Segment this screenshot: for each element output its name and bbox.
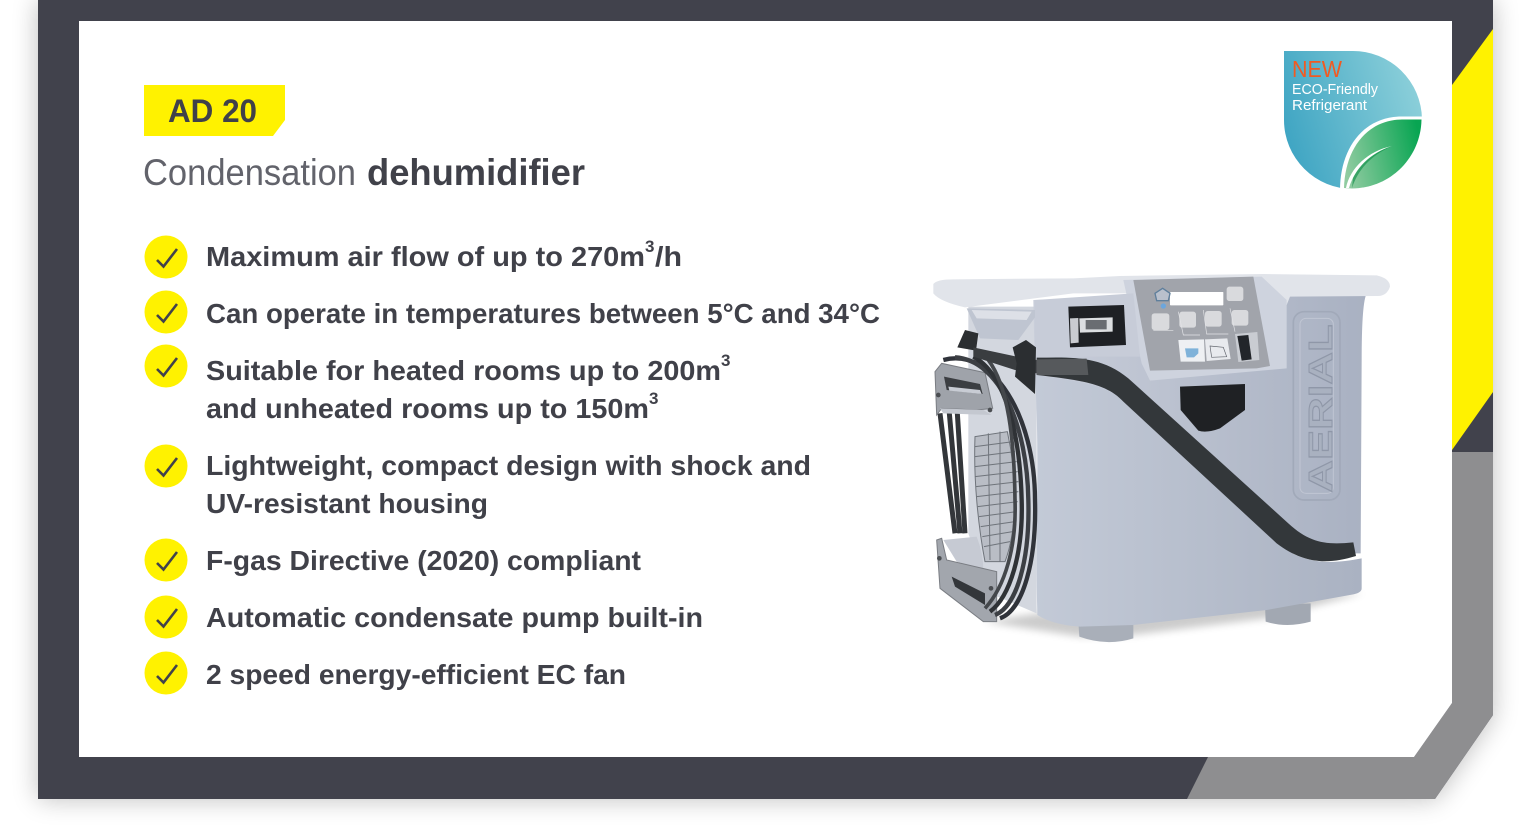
- feature: fan: 2 speed energy-efficient EC fan: [206, 659, 626, 690]
- feature: F-gas: F-gas Directive (2020) compliant: [206, 545, 641, 576]
- feature: pump: Automatic condensate pump built-in: [206, 602, 703, 633]
- feature: air flow: 3: [645, 237, 654, 256]
- feature: room size: and unheated rooms up to 150m: [206, 393, 649, 424]
- product photo: dehumidifier: [933, 274, 1390, 642]
- feature: air flow: /h: [655, 241, 682, 272]
- panel: white content area: [79, 21, 1452, 757]
- heading: [143, 152, 585, 193]
- feature: room size: [144, 344, 730, 424]
- feature: housing: UV-resistant housing: [206, 488, 488, 519]
- upper body: [1033, 293, 1366, 553]
- cord clips and strap: [957, 330, 1088, 394]
- feature: housing: [144, 444, 811, 519]
- left cord strands: [940, 413, 965, 533]
- product shadow: [983, 593, 1363, 637]
- feature: fan: [144, 652, 626, 694]
- heading: dehumidifier: [367, 152, 585, 193]
- feature: F-gas: [144, 538, 641, 582]
- feature: air flow: [144, 236, 682, 278]
- feature: room size: Suitable for heated rooms up to 200m: [206, 355, 721, 386]
- rubber band: [1037, 357, 1356, 561]
- AERIAL emblem: AERIAL: [1303, 324, 1340, 493]
- feature: air flow: Maximum air flow of up to 270m: [206, 241, 645, 272]
- model tag: [144, 85, 285, 136]
- feature: temperature: Can operate in temperatures between 5°C and 34°C: [206, 298, 880, 329]
- feature list: [144, 236, 880, 694]
- badge: eco-friendly refrigerant: [1284, 51, 1423, 190]
- feature: pump: [144, 596, 703, 638]
- lid and panel surround: [933, 274, 1390, 381]
- fan grille: [975, 432, 1018, 562]
- rating label: [1068, 305, 1126, 347]
- control panel: [1133, 277, 1270, 371]
- badge: eco-friendly refrigerant: NEW: [1292, 56, 1342, 82]
- feature: temperature: [144, 290, 880, 334]
- coiled power cord: [943, 357, 1035, 618]
- lower front panel: [1035, 375, 1362, 627]
- badge: eco-friendly refrigerant: ECO-Friendly: [1292, 81, 1378, 98]
- feature: room size: 3: [721, 351, 730, 370]
- black cover plate: [1180, 384, 1245, 432]
- feet: [1078, 603, 1311, 642]
- rear housing: [968, 307, 1037, 613]
- feature: room size: 3: [649, 389, 658, 408]
- feature: housing: Lightweight, compact design with shock and: [206, 450, 811, 481]
- badge: eco-friendly refrigerant: Refrigerant: [1292, 97, 1368, 114]
- heading: Condensation: [143, 152, 356, 193]
- AERIAL emblem: [1293, 312, 1340, 500]
- carry handle frames: [935, 363, 997, 622]
- model tag: AD 20: [168, 93, 257, 129]
